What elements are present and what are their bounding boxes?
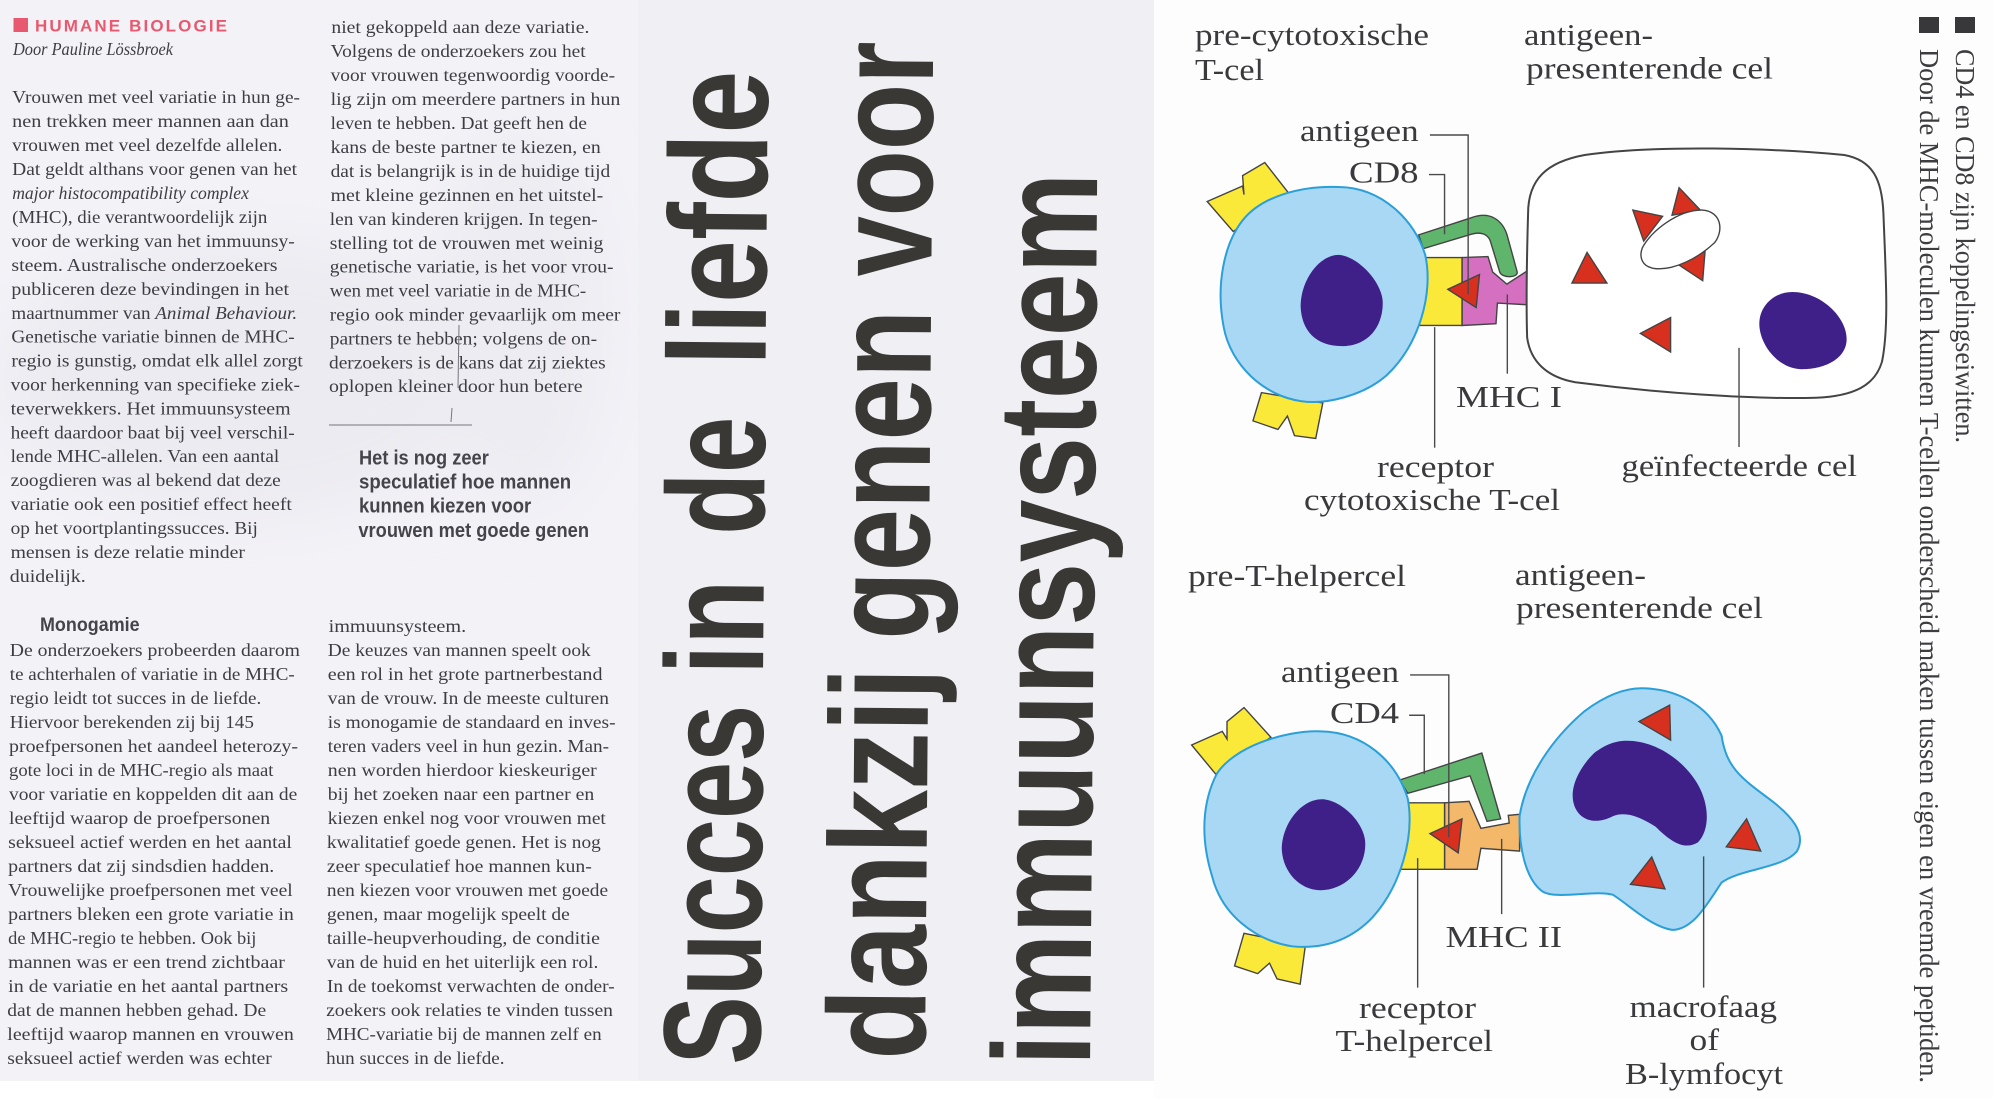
text block: intro column 2: len van kinderen krijgen. In tegen-	[330, 209, 598, 229]
text block: Monogamie column 1: in de variatie en het aantal partners	[8, 976, 288, 996]
icon: upper receptor on helper cell	[1192, 708, 1271, 774]
text block: intro column 2: derzoekers is de kans dat zij ziektes	[329, 352, 606, 372]
leader lines	[1409, 675, 1704, 988]
icon: infected cell nucleus	[1759, 292, 1847, 369]
text block: Monogamie column 1: De onderzoekers probeerden daarom	[10, 640, 300, 660]
labels: top diagram	[1195, 17, 1857, 517]
icon: macrophage nucleus	[1573, 741, 1707, 846]
icon: lower receptor on T-cell	[1253, 393, 1323, 438]
text block: Monogamie column 2: teren vaders veel in hun gezin. Man-	[328, 736, 609, 756]
leader lines	[1429, 135, 1739, 448]
labels: top diagram: presenterende cel	[1526, 50, 1773, 86]
text block: Monogamie column 2: hun succes in de liefde.	[326, 1048, 504, 1068]
text block: intro column 1: regio is gunstig, omdat elk allel zorgt	[11, 350, 303, 370]
pull quote	[358, 448, 589, 542]
labels: bottom diagram: MHC II	[1446, 919, 1562, 954]
text block: intro column 2: regio ook minder gevaarlijk om meer	[330, 304, 620, 324]
text block: intro column 1: major histocompatibility complex	[12, 183, 249, 203]
text block: Monogamie column 2: De keuzes van mannen speelt ook	[328, 640, 591, 660]
text block: Monogamie column 2: nen kiezen voor vrouwen met goede	[327, 880, 608, 900]
pull quote: Het is nog zeer	[359, 448, 489, 470]
labels: top diagram: receptor	[1377, 449, 1495, 484]
text block: Monogamie column 1: regio leidt tot succes in de liefde.	[10, 688, 261, 708]
text block: Monogamie column 1: Vrouwelijke proefpersonen met veel	[8, 880, 293, 900]
title: rotated headline: Succes	[635, 704, 793, 1065]
text block: Monogamie column 2: immuunsysteem.	[329, 616, 466, 636]
text block: Monogamie column 1: leeftijd waarop de proefpersonen	[9, 808, 270, 828]
text block: Monogamie column 2: nen worden hierdoor kieskeuriger	[328, 760, 597, 780]
text block: intro column 1: voor de werking van het immuunsy-	[11, 231, 295, 251]
icon: upper receptor on T-cell	[1207, 163, 1290, 231]
text block: Monogamie column 2: MHC-variatie bij de mannen zelf en	[326, 1024, 602, 1044]
text block: intro column 2: oplopen kleiner door hun betere	[329, 376, 583, 396]
text block: Monogamie column 2: genen, maar mogelijk speelt de	[327, 904, 570, 924]
section label: Humane Biologie: HUMANE BIOLOGIE	[35, 16, 227, 36]
text block: Monogamie column 2: kwalitatief goede genen. Het is nog	[327, 832, 601, 852]
text block: Monogamie column 2: zoekers ook relaties te vinden tussen	[326, 1000, 613, 1020]
text block: intro column 2: partners te hebben; volgens de on-	[330, 328, 597, 348]
text block: intro column 1	[10, 87, 303, 586]
note: CD4 and CD8: CD4 en CD8 zijn koppelingseiwitten.	[1950, 49, 1980, 443]
text block: Monogamie column 1: seksueel actief werden was echter	[7, 1048, 272, 1068]
labels: top diagram: geïnfecteerde cel	[1622, 448, 1857, 483]
icon: macrophage or B-lymphocyte	[1520, 688, 1800, 930]
text block: intro column 2: Volgens de onderzoekers zou het	[331, 41, 586, 61]
text block: Monogamie column 2: zeer speculatief hoe mannen kun-	[327, 856, 592, 876]
icon: MHC I molecule	[1462, 257, 1528, 325]
icon: bound antigen	[1430, 819, 1462, 853]
labels: bottom diagram	[1188, 557, 1783, 1091]
text block: Monogamie column 2: bij het zoeken naar een partner en	[328, 784, 594, 804]
icon: CD8 protein	[1419, 215, 1517, 277]
labels: bottom diagram: of	[1690, 1022, 1720, 1057]
text block: Monogamie column 1: voor variatie en koppelden dit aan de	[9, 784, 297, 804]
text block: intro column 1: op het voortplantingssucces. Bij	[11, 518, 258, 538]
heading: Monogamie: Monogamie	[40, 615, 140, 636]
icon: helper cell nucleus	[1282, 799, 1365, 890]
text block: intro column 1: Genetische variatie binnen de MHC-	[11, 326, 295, 346]
icon: antigens in macrophage	[1630, 705, 1761, 889]
labels: top diagram: antigeen	[1300, 113, 1419, 148]
icon: T-cell receptor	[1420, 258, 1462, 325]
pull quote: speculatief hoe mannen	[359, 472, 571, 494]
text block: intro column 2: dat is belangrijk is in de huidige tijd	[331, 161, 610, 181]
text block: Monogamie column 1: partners bleken een grote variatie in	[8, 904, 294, 924]
text block: intro column 2: met kleine gezinnen en het uitstel-	[331, 185, 603, 205]
icon: free antigens	[1572, 188, 1705, 352]
title: rotated headline: dankzij	[800, 667, 958, 1060]
labels: top diagram: pre-cytotoxische	[1195, 17, 1429, 52]
labels: bottom diagram: antigeen	[1281, 654, 1400, 689]
text block: intro column 1: zoogdieren was al bekend dat deze	[11, 470, 281, 490]
text block: intro column 1: publiceren deze bevindingen in het	[11, 279, 289, 299]
labels: top diagram: T-cel	[1195, 52, 1264, 87]
text block: intro column 1: voor herkenning van specifieke ziek-	[11, 374, 300, 394]
text block: Monogamie column 2: kiezen enkel nog voor vrouwen met	[328, 808, 606, 828]
pull quote: kunnen kiezen voor	[359, 496, 531, 518]
labels: bottom diagram: macrofaag	[1630, 989, 1777, 1024]
text block: Monogamie column 2: van de vrouw. In de meeste culturen	[328, 688, 609, 708]
text block: Monogamie column 1: te achterhalen of variatie in de MHC-	[10, 664, 295, 684]
text block: intro column 2: niet gekoppeld aan deze variatie.	[331, 17, 589, 37]
labels: bottom diagram: presenterende cel	[1516, 590, 1763, 625]
pull quote: vrouwen met goede genen	[358, 520, 589, 542]
labels: bottom diagram: receptor	[1359, 990, 1477, 1025]
text block: intro column 1: duidelijk.	[10, 566, 86, 586]
labels: top diagram: antigeen-	[1524, 17, 1653, 52]
text block: intro column 2: stelling tot de vrouwen met weinig	[330, 233, 603, 253]
text block: intro column 2: voor vrouwen tegenwoordig voorde-	[331, 65, 615, 85]
text block: intro column 1: (MHC), die verantwoordelijk zijn	[12, 207, 267, 228]
text block: intro column 2: leven te hebben. Dat geeft hen de	[331, 113, 587, 133]
note: MHC molecules: Door de MHC-moleculen kunnen T-cellen onderscheid maken tussen eigen en vreemde peptiden.	[1914, 49, 1944, 1083]
icon: bound antigen	[1448, 274, 1479, 308]
title: rotated headline	[635, 41, 1127, 1066]
text block: Monogamie column 1: seksueel actief werden en het aantal	[8, 832, 292, 852]
text block: intro column 1: variatie ook een positief effect heeft	[11, 494, 292, 514]
title: rotated headline: genen	[803, 309, 961, 640]
side notes: rotated captions	[1914, 17, 1980, 1083]
text block: intro column 1: Vrouwen met veel variatie in hun ge-	[12, 87, 300, 107]
icon: proteasome oval	[1641, 210, 1720, 269]
text block: Monogamie column 1: de MHC-regio te hebben. Ook bij	[8, 928, 256, 948]
text block: Monogamie column 2: In de toekomst verwachten de onder-	[327, 976, 615, 996]
text block: Monogamie column 1: dat de mannen hebben gehad. De	[7, 1000, 266, 1020]
text block: Monogamie column 2: is monogamie de standaard en inves-	[328, 712, 616, 732]
text block: Monogamie column 1	[7, 640, 300, 1068]
labels: bottom diagram: antigeen-	[1515, 557, 1646, 592]
diagram: T-helper cell and macrophage	[1188, 557, 1800, 1091]
text block: intro column 1: maartnummer van Animal Behaviour.	[11, 303, 297, 323]
labels: bottom diagram: B-lymfocyt	[1625, 1056, 1783, 1091]
icon: CD4 protein	[1400, 753, 1501, 821]
text block: intro column 2: wen met veel variatie in de MHC-	[330, 280, 586, 300]
byline: Door Pauline Lössbroek	[12, 39, 174, 59]
title: rotated headline: in	[638, 579, 794, 675]
icon: pre-T-helper cell	[1204, 731, 1410, 947]
icon: MHC II molecule	[1445, 801, 1520, 869]
text block: Monogamie column 2	[326, 616, 616, 1068]
labels: bottom diagram: CD4	[1330, 695, 1400, 730]
text block: intro column 1: vrouwen met veel dezelfde allelen.	[12, 135, 282, 155]
diagram: cytotoxic T-cell and infected cell	[1195, 17, 1886, 517]
icon: helper cell receptor	[1401, 803, 1445, 869]
text block: Monogamie column 1: Hiervoor berekenden zij bij 145	[10, 712, 254, 732]
text block: intro column 2: kans de beste partner te kiezen, en	[331, 137, 601, 157]
title: rotated headline: immuunsysteem	[965, 172, 1127, 1066]
icon: pre-cytotoxic T-cell	[1221, 187, 1428, 402]
icon: lower receptor on helper cell	[1235, 933, 1305, 984]
text block: Monogamie column 2: een rol in het grote partnerbestand	[328, 664, 602, 684]
text block: Monogamie column 1: partners dat zij sindsdien hadden.	[8, 856, 274, 876]
text block: Monogamie column 2: van de huid en het uiterlijk een rol.	[327, 952, 598, 972]
title: rotated headline: liefde	[641, 70, 798, 366]
labels: top diagram: cytotoxische T-cel	[1304, 482, 1560, 517]
text block: intro column 1: steem. Australische onderzoekers	[11, 255, 278, 275]
text block: Monogamie column 1: mannen was er een trend zichtbaar	[8, 952, 285, 972]
text block: intro column 1: heeft daardoor baat bij veel verschil-	[11, 422, 295, 442]
text block: intro column 2: genetische variatie, is het voor vrou-	[330, 256, 614, 276]
text block: intro column 2	[329, 17, 620, 396]
labels: top diagram: CD8	[1349, 154, 1419, 190]
panel: article text	[7, 16, 620, 1068]
text block: intro column 2: lig zijn om meerdere partners in hun	[331, 89, 620, 109]
text block: Monogamie column 1: proefpersonen het aandeel heterozy-	[9, 736, 298, 756]
title: rotated headline: de	[639, 416, 795, 535]
labels: top diagram: MHC I	[1456, 379, 1562, 414]
text block: intro column 1: nen trekken meer mannen aan dan	[12, 111, 289, 131]
text block: Monogamie column 1: leeftijd waarop mannen en vrouwen	[7, 1024, 294, 1044]
text block: intro column 1: lende MHC-allelen. Van een aantal	[11, 446, 279, 466]
labels: bottom diagram: T-helpercel	[1336, 1023, 1493, 1058]
text block: intro column 1: mensen is deze relatie minder	[11, 542, 245, 562]
text block: intro column 1: teverwekkers. Het immuunsysteem	[11, 398, 291, 418]
text block: Monogamie column 2: taille-heupverhouding, de conditie	[327, 928, 600, 948]
text block: Monogamie column 1: gote loci in de MHC-regio als maat	[9, 760, 274, 780]
text block: intro column 1: Dat geldt althans voor genen van het	[12, 159, 297, 179]
icon: infected cell outline	[1527, 148, 1886, 398]
icon: T-cell nucleus	[1301, 255, 1383, 346]
labels: bottom diagram: pre-T-helpercel	[1188, 558, 1406, 593]
